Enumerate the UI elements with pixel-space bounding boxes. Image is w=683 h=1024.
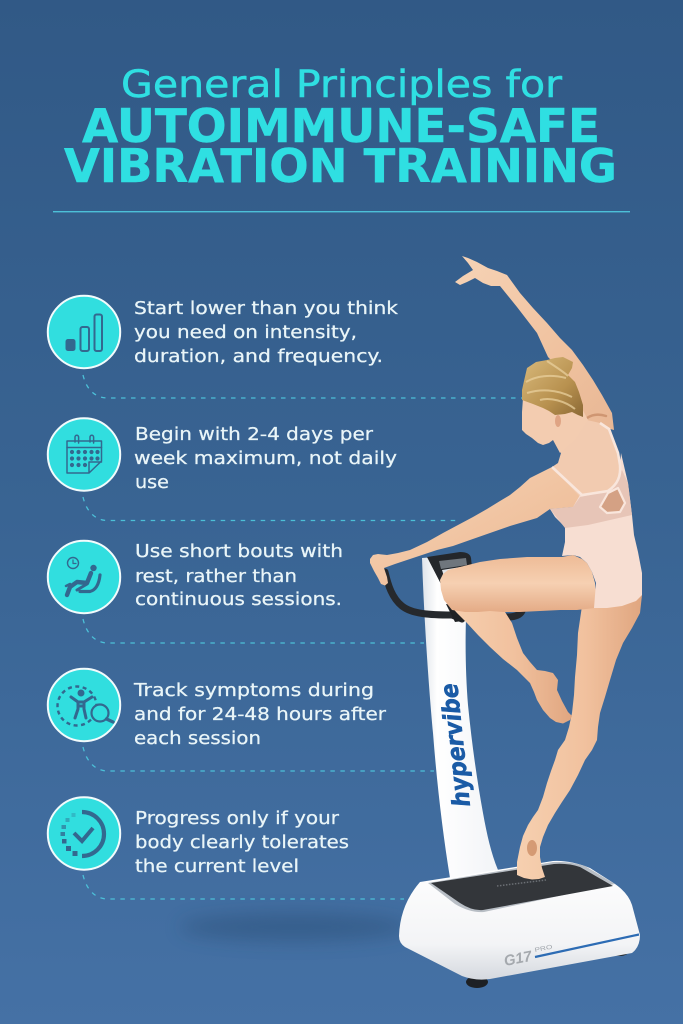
standing leg [517,595,642,880]
vibration machine [385,552,640,988]
text: progress only: Progress only if your [135,809,340,829]
raised thigh [440,555,596,612]
text: begin with: use [135,473,169,493]
item 5: progress [48,797,349,877]
face [522,385,588,453]
text: use short bouts [135,542,343,610]
foot sole shading [527,840,537,856]
item 4: track symptoms [48,669,387,749]
icon: signal bars [48,296,120,368]
text: use short bouts: Use short bouts with [135,542,343,562]
raised arm [455,256,614,430]
text: progress only: body clearly tolerates [135,833,349,853]
text: use short bouts: rest, rather than [135,567,297,587]
icon: progress check [48,797,120,870]
text: track symptoms: and for 24-48 hours after [134,705,387,725]
dashed connectors [83,375,522,899]
hair [522,357,583,417]
text: track symptoms: Track symptoms during [133,681,374,701]
text: track symptoms [133,681,387,749]
text: start lower: Start lower than you think [134,299,399,319]
raised lower leg [445,600,572,724]
text: track symptoms: each session [134,729,261,749]
brand: hypervibe: hypervibe [435,682,476,808]
extended arm [370,467,582,586]
machine base [399,861,640,988]
model label [503,945,553,970]
dancer figure [370,256,642,880]
machine console [427,552,473,588]
head [522,357,588,453]
armpit crease [587,415,606,418]
text: use short bouts: continuous sessions. [135,590,342,610]
text: begin with: week maximum, not daily [134,449,397,469]
model label: G17 [503,948,534,970]
title [64,63,617,193]
leotard keyhole [600,488,625,513]
floor shadow [180,913,410,941]
icon: body scan with magnifier [48,669,120,741]
icon: clock and reclining person [48,541,120,613]
text: begin with: Begin with 2-4 days per [135,425,374,445]
machine stripe [535,934,639,957]
leotard straps [552,423,620,495]
machine handlebar [385,572,522,619]
model label: PRO [534,945,553,954]
title: VIBRATION TRAINING [64,139,617,193]
item 1: intensity [48,296,399,368]
machine column [422,555,498,878]
leotard mesh back [550,470,632,528]
title: General Principles for [121,63,563,106]
title: AUTOIMMUNE-SAFE [82,99,600,153]
machine plate [431,864,613,910]
ear [555,415,561,427]
text: progress only [135,809,349,877]
icon: calendar [48,418,120,491]
item 2: days per week [48,418,397,493]
item 3: short bouts [48,541,343,613]
back [552,420,621,497]
text: begin with [134,425,397,493]
text: start lower: duration, and frequency. [134,347,383,367]
leotard [550,423,642,608]
text: progress only: the current level [135,857,299,877]
text: start lower [134,299,399,367]
text: start lower: you need on intensity, [134,323,357,343]
